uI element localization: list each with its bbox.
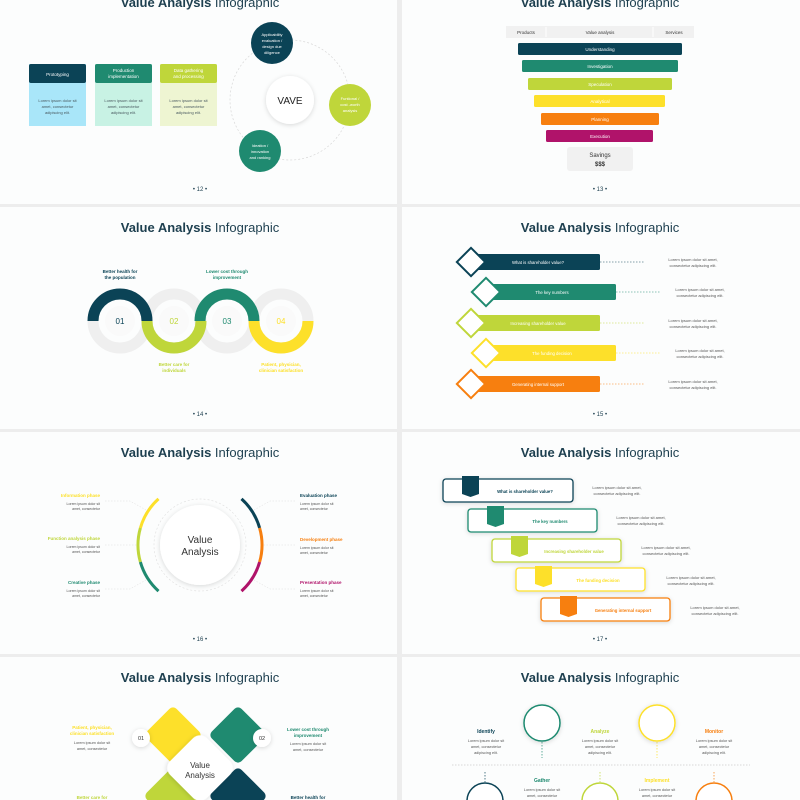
- center circle: Analysis: [181, 547, 219, 558]
- wave circles: 01: [116, 317, 125, 326]
- step labels: [497, 489, 652, 613]
- descriptions: [668, 257, 725, 390]
- step descriptions: Lorem ipsum dolor sit amet,: [690, 605, 740, 610]
- step descriptions: consectetur adipiscing elit.: [668, 581, 714, 586]
- left labels: Lorem ipsum dolor sit: [67, 545, 100, 549]
- funnel bars: Investigation: [587, 64, 613, 69]
- step descriptions: Lorem ipsum dolor sit amet,: [616, 515, 666, 520]
- labels: individuals: [162, 368, 186, 373]
- diamonds: Value: [190, 761, 210, 770]
- funnel bars: Speculation: [588, 82, 612, 87]
- ribbon rows: The funding decision: [532, 351, 572, 356]
- step boxes: [443, 479, 670, 621]
- timeline labels: amet, consectetur: [527, 794, 558, 798]
- VAVE cycle: diligence: [264, 50, 281, 55]
- card: production: implementation: [108, 74, 139, 79]
- title: Value Analysis Infographic: [121, 445, 280, 460]
- step labels: The key numbers: [532, 519, 568, 524]
- timeline labels: adipiscing elit.: [588, 751, 612, 755]
- right labels: amet, consectetur: [300, 507, 329, 511]
- right labels: Lorem ipsum dolor sit: [300, 589, 333, 593]
- labels: Better care for: [77, 795, 108, 800]
- timeline labels: amet, consectetur: [642, 794, 673, 798]
- timeline labels: Monitor: [705, 729, 723, 735]
- right labels: amet, consectetur: [300, 551, 329, 555]
- title: Value Analysis Infographic: [121, 670, 280, 685]
- descriptions: consectetur adipiscing elit.: [677, 293, 723, 298]
- wave circles: [93, 294, 308, 348]
- timeline labels: Lorem ipsum dolor sit: [468, 739, 505, 743]
- timeline labels: adipiscing elit.: [702, 751, 726, 755]
- card: data gathering: amet, consectetur: [173, 104, 205, 109]
- card: production: amet, consectetur: [108, 104, 140, 109]
- center circle: Value: [188, 535, 213, 546]
- header bar: Value analysis: [586, 30, 615, 35]
- dashed connectors: [600, 262, 661, 384]
- diamonds: Analysis: [185, 771, 215, 780]
- title: Value Analysis Infographic: [521, 445, 680, 460]
- header bar: Products: [517, 30, 536, 35]
- timeline labels: Implement: [644, 778, 670, 784]
- step labels: The funding decision: [576, 578, 620, 583]
- left labels: Creative phase: [68, 580, 100, 585]
- timeline labels: amet, consectetur: [699, 745, 730, 749]
- VAVE cycle: Applicability: [261, 32, 283, 37]
- labels: [70, 725, 329, 800]
- card: data gathering: adipiscing elit.: [176, 110, 201, 115]
- descriptions: Lorem ipsum dolor sit amet,: [668, 318, 718, 323]
- labels: Better care for: [159, 362, 190, 367]
- savings box: $$$: [595, 162, 606, 168]
- descriptions: Lorem ipsum dolor sit amet,: [675, 348, 725, 353]
- diamonds: [132, 705, 271, 800]
- right labels: Evaluation phase: [300, 493, 338, 498]
- left labels: Function analysis phase: [48, 536, 100, 541]
- VAVE cycle: analysis: [343, 108, 357, 113]
- card: prototyping: [29, 64, 86, 126]
- step descriptions: [592, 485, 740, 616]
- diamonds: 01: [138, 736, 144, 742]
- step descriptions: Lorem ipsum dolor sit amet,: [592, 485, 642, 490]
- descriptions: consectetur adipiscing elit.: [670, 324, 716, 329]
- labels: improvement: [294, 733, 323, 738]
- step descriptions: Lorem ipsum dolor sit amet,: [641, 545, 691, 550]
- timeline labels: Analyze: [591, 729, 610, 735]
- page number 12: • 12 •: [193, 187, 207, 193]
- labels: improvement: [213, 275, 242, 280]
- title: Value Analysis Infographic: [121, 220, 280, 235]
- funnel bars: Planning: [591, 117, 609, 122]
- wave circles: 02: [170, 317, 179, 326]
- right labels: amet, consectetur: [300, 594, 329, 598]
- page number 15: • 15 •: [593, 412, 607, 418]
- connectors: [105, 501, 295, 589]
- page number 14: • 14 •: [193, 412, 207, 418]
- arcs: [138, 499, 262, 591]
- labels: Better health for: [103, 269, 138, 274]
- diamond icons: [457, 248, 500, 398]
- title: Value Analysis Infographic: [521, 220, 680, 235]
- timeline labels: amet, consectetur: [585, 745, 616, 749]
- funnel bars: [518, 43, 682, 142]
- left labels: Lorem ipsum dolor sit: [67, 502, 100, 506]
- page number 13: • 13 •: [593, 187, 607, 193]
- slide 14: [93, 220, 308, 418]
- step descriptions: consectetur adipiscing elit.: [643, 551, 689, 556]
- badge icons: [462, 476, 577, 617]
- page number 17: • 17 •: [593, 637, 607, 643]
- center circle: [154, 499, 246, 591]
- left labels: [48, 493, 101, 598]
- title: Value Analysis Infographic: [521, 670, 680, 685]
- labels: clinician satisfaction: [70, 731, 114, 736]
- card: production: Production: [113, 68, 135, 73]
- step descriptions: consectetur adipiscing elit.: [692, 611, 738, 616]
- header bar: Services: [665, 30, 683, 35]
- descriptions: consectetur adipiscing elit.: [670, 385, 716, 390]
- labels: Lower cost through: [206, 269, 248, 274]
- card: prototyping: Lorem ipsum dolor sit: [38, 98, 78, 103]
- timeline line: [452, 742, 750, 782]
- slide 16: [48, 445, 343, 643]
- step labels: Generating internal support: [595, 608, 652, 613]
- left labels: amet, consectetur: [72, 507, 101, 511]
- step descriptions: consectetur adipiscing elit.: [594, 491, 640, 496]
- page number 16: • 16 •: [193, 637, 207, 643]
- savings box: [567, 147, 633, 171]
- savings box: Savings: [589, 153, 611, 159]
- timeline labels: [468, 729, 733, 798]
- ribbon rows: Increasing shareholder value: [510, 321, 566, 326]
- funnel bars: Understanding: [585, 47, 615, 52]
- VAVE cycle: cost -worth: [340, 102, 360, 107]
- card: production: Lorem ipsum dolor sit: [104, 98, 144, 103]
- VAVE cycle: design due: [262, 44, 283, 49]
- slide 13: [506, 0, 694, 193]
- left labels: amet, consectetur: [72, 550, 101, 554]
- labels: Patient, physician,: [72, 725, 112, 730]
- left labels: Lorem ipsum dolor sit: [67, 589, 100, 593]
- labels: amet, consectetur: [77, 747, 108, 751]
- right labels: [300, 493, 343, 598]
- right labels: Presentation phase: [300, 580, 342, 585]
- timeline labels: Lorem ipsum dolor sit: [582, 739, 619, 743]
- timeline labels: Lorem ipsum dolor sit: [524, 788, 561, 792]
- ribbon rows: The key numbers: [535, 290, 569, 295]
- timeline circles: [467, 705, 732, 800]
- VAVE cycle: innovation: [251, 149, 269, 154]
- VAVE cycle: and ranking: [250, 155, 270, 160]
- VAVE cycle: evaluation /: [262, 38, 283, 43]
- step labels: What is shareholder value?: [497, 489, 553, 494]
- descriptions: Lorem ipsum dolor sit amet,: [668, 379, 718, 384]
- slide 15: [457, 220, 725, 418]
- timeline labels: Gather: [534, 778, 550, 784]
- wave circles: 04: [277, 317, 286, 326]
- right labels: Lorem ipsum dolor sit: [300, 502, 333, 506]
- card: data gathering: Lorem ipsum dolor sit: [169, 98, 208, 103]
- descriptions: Lorem ipsum dolor sit amet,: [668, 257, 718, 262]
- descriptions: consectetur adipiscing elit.: [670, 263, 716, 268]
- funnel bars: Analytical: [590, 99, 610, 104]
- VAVE cycle: VAVE: [277, 96, 303, 107]
- timeline labels: amet, consectetur: [471, 745, 502, 749]
- left labels: amet, consectetur: [72, 594, 101, 598]
- funnel bars: Execution: [590, 134, 610, 139]
- ribbon rows: Generating internal support: [512, 382, 565, 387]
- ribbon rows: What is shareholder value?: [512, 260, 565, 265]
- slide 17: [443, 445, 740, 643]
- labels: Lorem ipsum dolor sit: [74, 741, 111, 745]
- timeline labels: adipiscing elit.: [474, 751, 498, 755]
- diamonds: 02: [259, 736, 265, 742]
- card: production: [95, 64, 152, 126]
- right labels: Lorem ipsum dolor sit: [300, 546, 333, 550]
- ribbon rows: [467, 254, 616, 392]
- slide 12: [29, 0, 371, 193]
- timeline labels: Identify: [477, 729, 495, 735]
- descriptions: Lorem ipsum dolor sit amet,: [675, 287, 725, 292]
- right labels: Development phase: [300, 537, 343, 542]
- labels: clinician satisfaction: [259, 368, 303, 373]
- wave circles: 03: [223, 317, 232, 326]
- VAVE cycle: Funtional /: [341, 96, 360, 101]
- labels: Lower cost through: [287, 727, 329, 732]
- labels: amet, consectetur: [293, 748, 324, 752]
- left labels: Information phase: [61, 493, 100, 498]
- slide 18: [70, 670, 329, 800]
- card: data gathering: [160, 64, 217, 126]
- slide 19: [452, 670, 750, 800]
- step descriptions: consectetur adipiscing elit.: [618, 521, 664, 526]
- labels: Patient, physician,: [261, 362, 301, 367]
- card: prototyping: amet, consectetur: [42, 104, 74, 109]
- labels: Better health for: [291, 795, 326, 800]
- labels: the population: [104, 275, 136, 280]
- descriptions: consectetur adipiscing elit.: [677, 354, 723, 359]
- VAVE cycle: [230, 22, 371, 172]
- timeline labels: Lorem ipsum dolor sit: [639, 788, 676, 792]
- step descriptions: Lorem ipsum dolor sit amet,: [666, 575, 716, 580]
- header bar: [506, 26, 694, 38]
- card: data gathering: and processing: [173, 74, 204, 79]
- card: prototyping: adipiscing elit.: [45, 110, 70, 115]
- timeline labels: Lorem ipsum dolor sit: [696, 739, 733, 743]
- card: prototyping: Prototyping: [46, 72, 69, 77]
- labels: Lorem ipsum dolor sit: [290, 742, 327, 746]
- VAVE cycle: Ideation /: [252, 143, 269, 148]
- card: production: adipiscing elit.: [111, 110, 136, 115]
- labels: [103, 269, 303, 373]
- step labels: Increasing shareholder value: [544, 549, 604, 554]
- card: data gathering: Data gathering: [174, 68, 204, 73]
